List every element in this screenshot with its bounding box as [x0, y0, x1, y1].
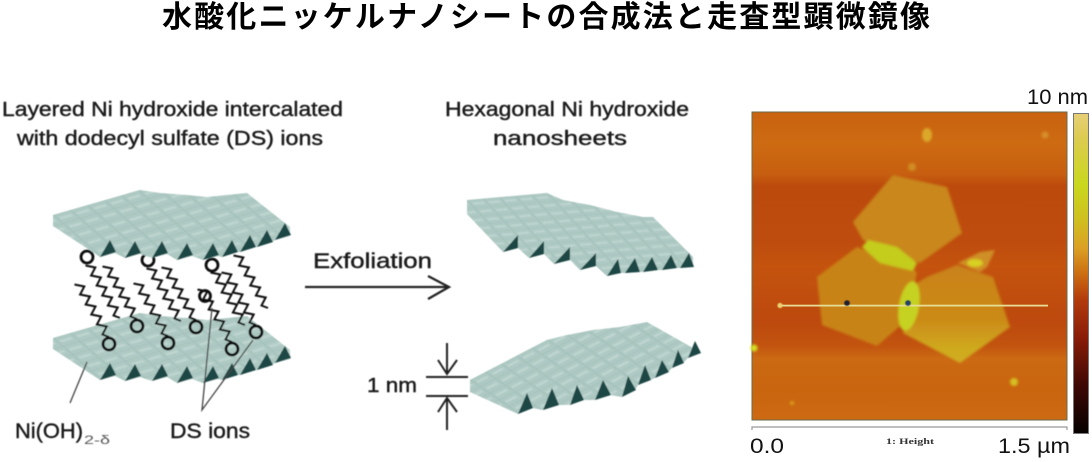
- label: 10 nm: 10 nm: [1027, 86, 1088, 109]
- heading: hexagonal nanosheets: nanosheets: [493, 128, 627, 150]
- nanosheet: upper: [467, 193, 694, 276]
- bottom Ni(OH)2 sheet: [53, 313, 291, 383]
- heading: layered Ni hydroxide: Layered Ni hydroxide intercalated: [2, 99, 343, 121]
- flake highlight and particles: [750, 128, 1048, 405]
- thickness marker: 1 nm: 1 nm: [367, 375, 417, 397]
- label: Ni(OH)2-δ: 2-δ: [84, 433, 110, 447]
- top Ni(OH)2 sheet: [53, 190, 291, 260]
- label: 1.5 µm: 1.5 µm: [998, 435, 1070, 458]
- diagram: layered structure with DS ions: [53, 190, 291, 410]
- label: 0.0: 0.0: [750, 435, 784, 458]
- nanosheet: lower: [470, 322, 701, 414]
- hexagonal nanosheet: top: [853, 175, 962, 263]
- hexagonal nanosheet: left: [817, 247, 917, 346]
- overlap: top and left sheets: [862, 240, 917, 271]
- heading: layered Ni hydroxide: [2, 99, 343, 150]
- heading: hexagonal nanosheets: [445, 99, 689, 150]
- colour scale bar: [1074, 114, 1088, 434]
- DS ion chains: [74, 251, 268, 355]
- label: Ni(OH)2-δ: [15, 420, 110, 447]
- section line: [780, 305, 1048, 306]
- small flake: [958, 250, 995, 272]
- arrow: exfoliation: [305, 276, 449, 299]
- heading: hexagonal nanosheets: Hexagonal Ni hydroxide: [445, 99, 689, 121]
- label: Exfoliation: Exfoliation: [313, 250, 432, 273]
- hexagonal nanosheet: right: [903, 265, 1010, 363]
- title: 水酸化ニッケルナノシートの合成法と走査型顕微鏡像: [162, 1, 930, 34]
- label: 1: Height: 1: Height: [886, 437, 934, 446]
- thickness marker: 1 nm: [367, 343, 468, 430]
- section markers: [777, 300, 911, 308]
- label: Ni(OH)2-δ: Ni(OH): [15, 420, 83, 443]
- overlap: left and right sheets: [895, 280, 923, 332]
- leader lines: [70, 308, 253, 410]
- AFM image: [750, 112, 1067, 420]
- scale bracket: [752, 427, 1067, 430]
- label: DS ions: DS ions: [170, 420, 250, 443]
- heading: layered Ni hydroxide: with dodecyl sulfate (DS) ions: [16, 128, 323, 150]
